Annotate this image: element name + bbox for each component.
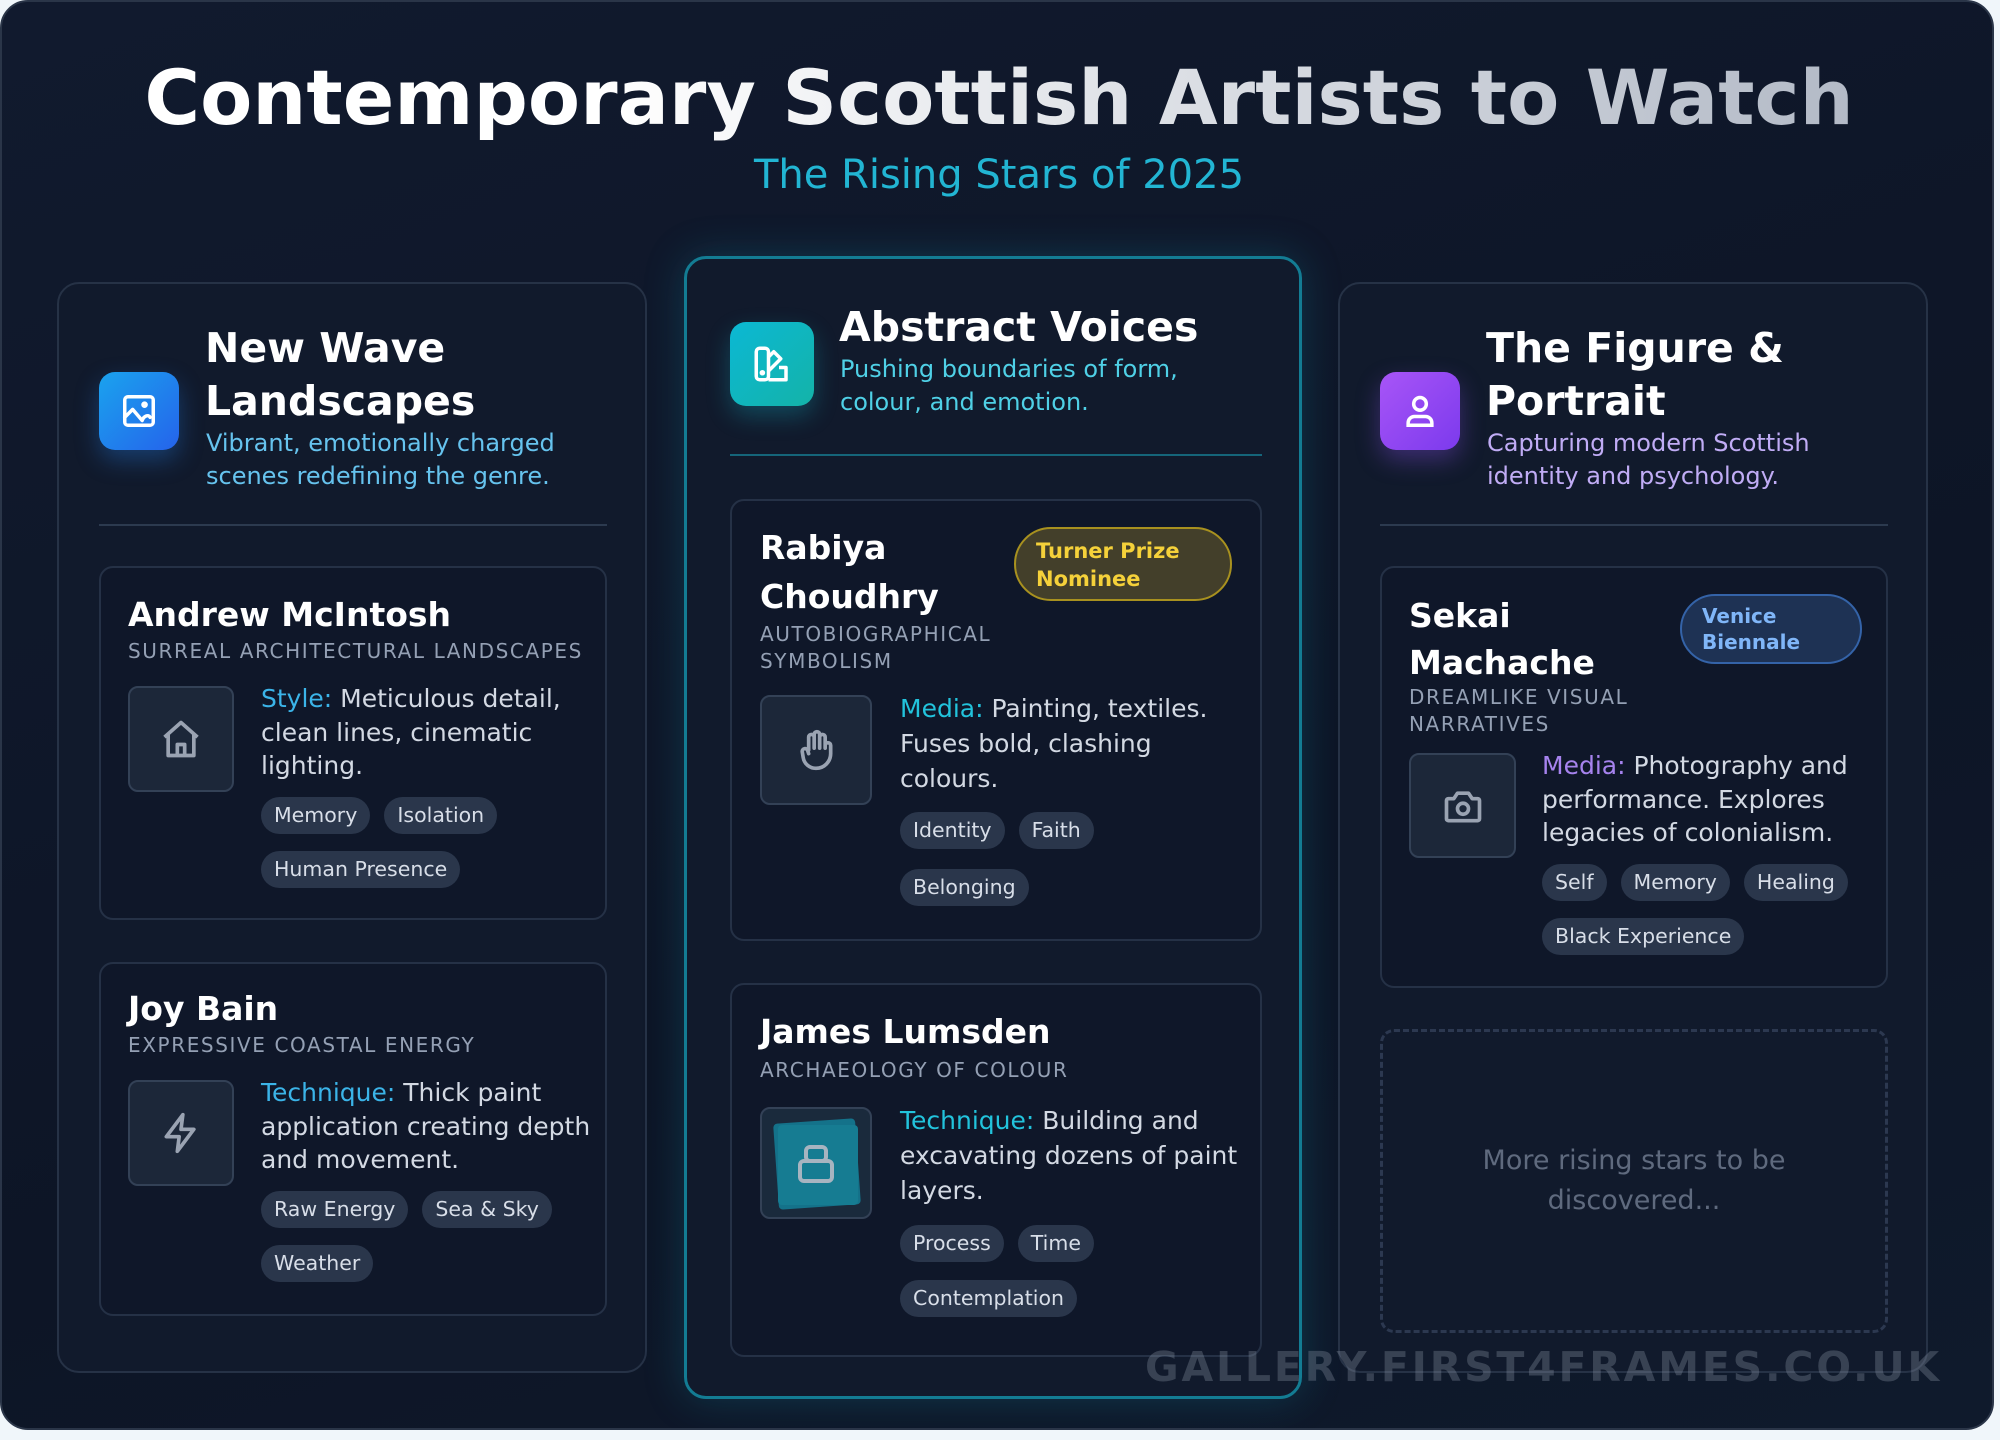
- tags: Contemplation: [913, 1286, 1064, 1310]
- panel: new wave landscapes: [57, 282, 647, 1373]
- description: Technique: Building and excavating dozens of paint layers.: [900, 1106, 1237, 1205]
- name: Machache: [1409, 643, 1595, 682]
- tags: Belonging: [913, 875, 1016, 899]
- artist card: Joy Bain: [99, 962, 607, 1316]
- watermark: GALLERY.FIRST4FRAMES.CO.UK: [1145, 1343, 1942, 1391]
- artist card: Sekai Machache: [1380, 566, 1888, 988]
- title: Contemporary Scottish Artists to Watch: [144, 53, 1854, 142]
- icon: palette: [730, 322, 814, 406]
- role: [760, 622, 991, 673]
- subheading: scenes redefining the genre.: [206, 462, 550, 490]
- placeholder: more rising stars: [1380, 1029, 1888, 1333]
- subheading: identity and psychology.: [1487, 462, 1779, 490]
- heading: Abstract Voices: [839, 303, 1198, 351]
- tags: Identity: [913, 818, 992, 842]
- tags: [900, 812, 1094, 906]
- tags: Black Experience: [1555, 924, 1731, 948]
- tags: Process: [913, 1231, 991, 1255]
- tags: [1542, 864, 1848, 955]
- name: Sekai: [1409, 596, 1511, 635]
- artist card: Rabiya Choudhry: [730, 499, 1262, 941]
- subheading: [840, 355, 1178, 416]
- artist card: James Lumsden: [730, 983, 1262, 1357]
- heading: [205, 324, 475, 425]
- heading: [1486, 324, 1784, 425]
- tags: Healing: [1757, 870, 1835, 894]
- name: [760, 528, 939, 616]
- subheading: [206, 429, 555, 490]
- tags: Faith: [1032, 818, 1081, 842]
- name: Rabiya: [760, 528, 886, 567]
- name: Joy Bain: [128, 989, 278, 1028]
- description: Media: Photography and performance. Explores legacies of colonialism.: [1542, 751, 1848, 847]
- name: Choudhry: [760, 577, 939, 616]
- artist card: Andrew McIntosh: [99, 566, 607, 920]
- role: EXPRESSIVE COASTAL ENERGY: [128, 1033, 475, 1057]
- badge: Turner Prize: Turner Prize: [1036, 539, 1180, 563]
- badge: Venice Biennale: Biennale: [1702, 630, 1800, 654]
- role: SYMBOLISM: [760, 649, 893, 673]
- subheading: [1487, 429, 1810, 490]
- description: Technique: Thick paint application creating depth and movement.: [261, 1078, 590, 1174]
- icon: lightning: [128, 1080, 234, 1186]
- icon: camera: [1409, 753, 1516, 858]
- icon: layers: [760, 1107, 872, 1219]
- role: ARCHAEOLOGY OF COLOUR: [760, 1058, 1069, 1082]
- heading: Landscapes: [205, 377, 475, 425]
- badge: Venice Biennale: [1680, 594, 1862, 664]
- tags: [261, 797, 497, 888]
- placeholder: more rising stars: discovered...: [1548, 1185, 1720, 1216]
- tags: Isolation: [397, 803, 484, 827]
- badge: Venice Biennale: Venice: [1702, 604, 1776, 628]
- subheading: Capturing modern Scottish: [1487, 429, 1810, 457]
- placeholder: more rising stars: More rising stars to be: [1483, 1145, 1785, 1176]
- tags: Sea & Sky: [435, 1197, 539, 1221]
- subheading: Vibrant, emotionally charged: [206, 429, 555, 457]
- name: [1409, 596, 1595, 682]
- name: Andrew McIntosh: [128, 595, 451, 634]
- tags: Human Presence: [274, 857, 447, 881]
- role: [1409, 685, 1628, 736]
- tags: Time: [1031, 1231, 1081, 1255]
- panel: abstract voices: [684, 256, 1302, 1399]
- tags: Memory: [274, 803, 357, 827]
- heading: New Wave: [205, 324, 445, 372]
- description: Style: Meticulous detail, clean lines, cinematic lighting.: [261, 684, 561, 780]
- icon: house: [128, 686, 234, 792]
- tags: Raw Energy: [274, 1197, 395, 1221]
- role: SURREAL ARCHITECTURAL LANDSCAPES: [128, 639, 583, 663]
- badge: Turner Prize: Nominee: [1036, 567, 1141, 591]
- subheading: colour, and emotion.: [840, 388, 1089, 416]
- description: Media: Painting, textiles. Fuses bold, clashing colours.: [900, 694, 1207, 793]
- badge: Turner Prize: [1014, 527, 1232, 601]
- role: AUTOBIOGRAPHICAL: [760, 622, 991, 646]
- tags: [900, 1225, 1094, 1317]
- icon: landscape image: [99, 372, 179, 450]
- panel: figure & portrait: [1338, 282, 1928, 1373]
- subtitle: The Rising Stars of 2025: [754, 152, 1244, 198]
- tags: [261, 1191, 552, 1282]
- subheading: Pushing boundaries of form,: [840, 355, 1178, 383]
- heading: The Figure &: [1486, 324, 1784, 372]
- role: NARRATIVES: [1409, 712, 1550, 736]
- tags: Self: [1555, 870, 1594, 894]
- icon: hand: [760, 695, 872, 805]
- icon: person: [1380, 372, 1460, 450]
- name: James Lumsden: [760, 1012, 1050, 1051]
- tags: Weather: [274, 1251, 360, 1275]
- heading: Portrait: [1486, 377, 1666, 425]
- tags: Memory: [1634, 870, 1717, 894]
- role: DREAMLIKE VISUAL: [1409, 685, 1628, 709]
